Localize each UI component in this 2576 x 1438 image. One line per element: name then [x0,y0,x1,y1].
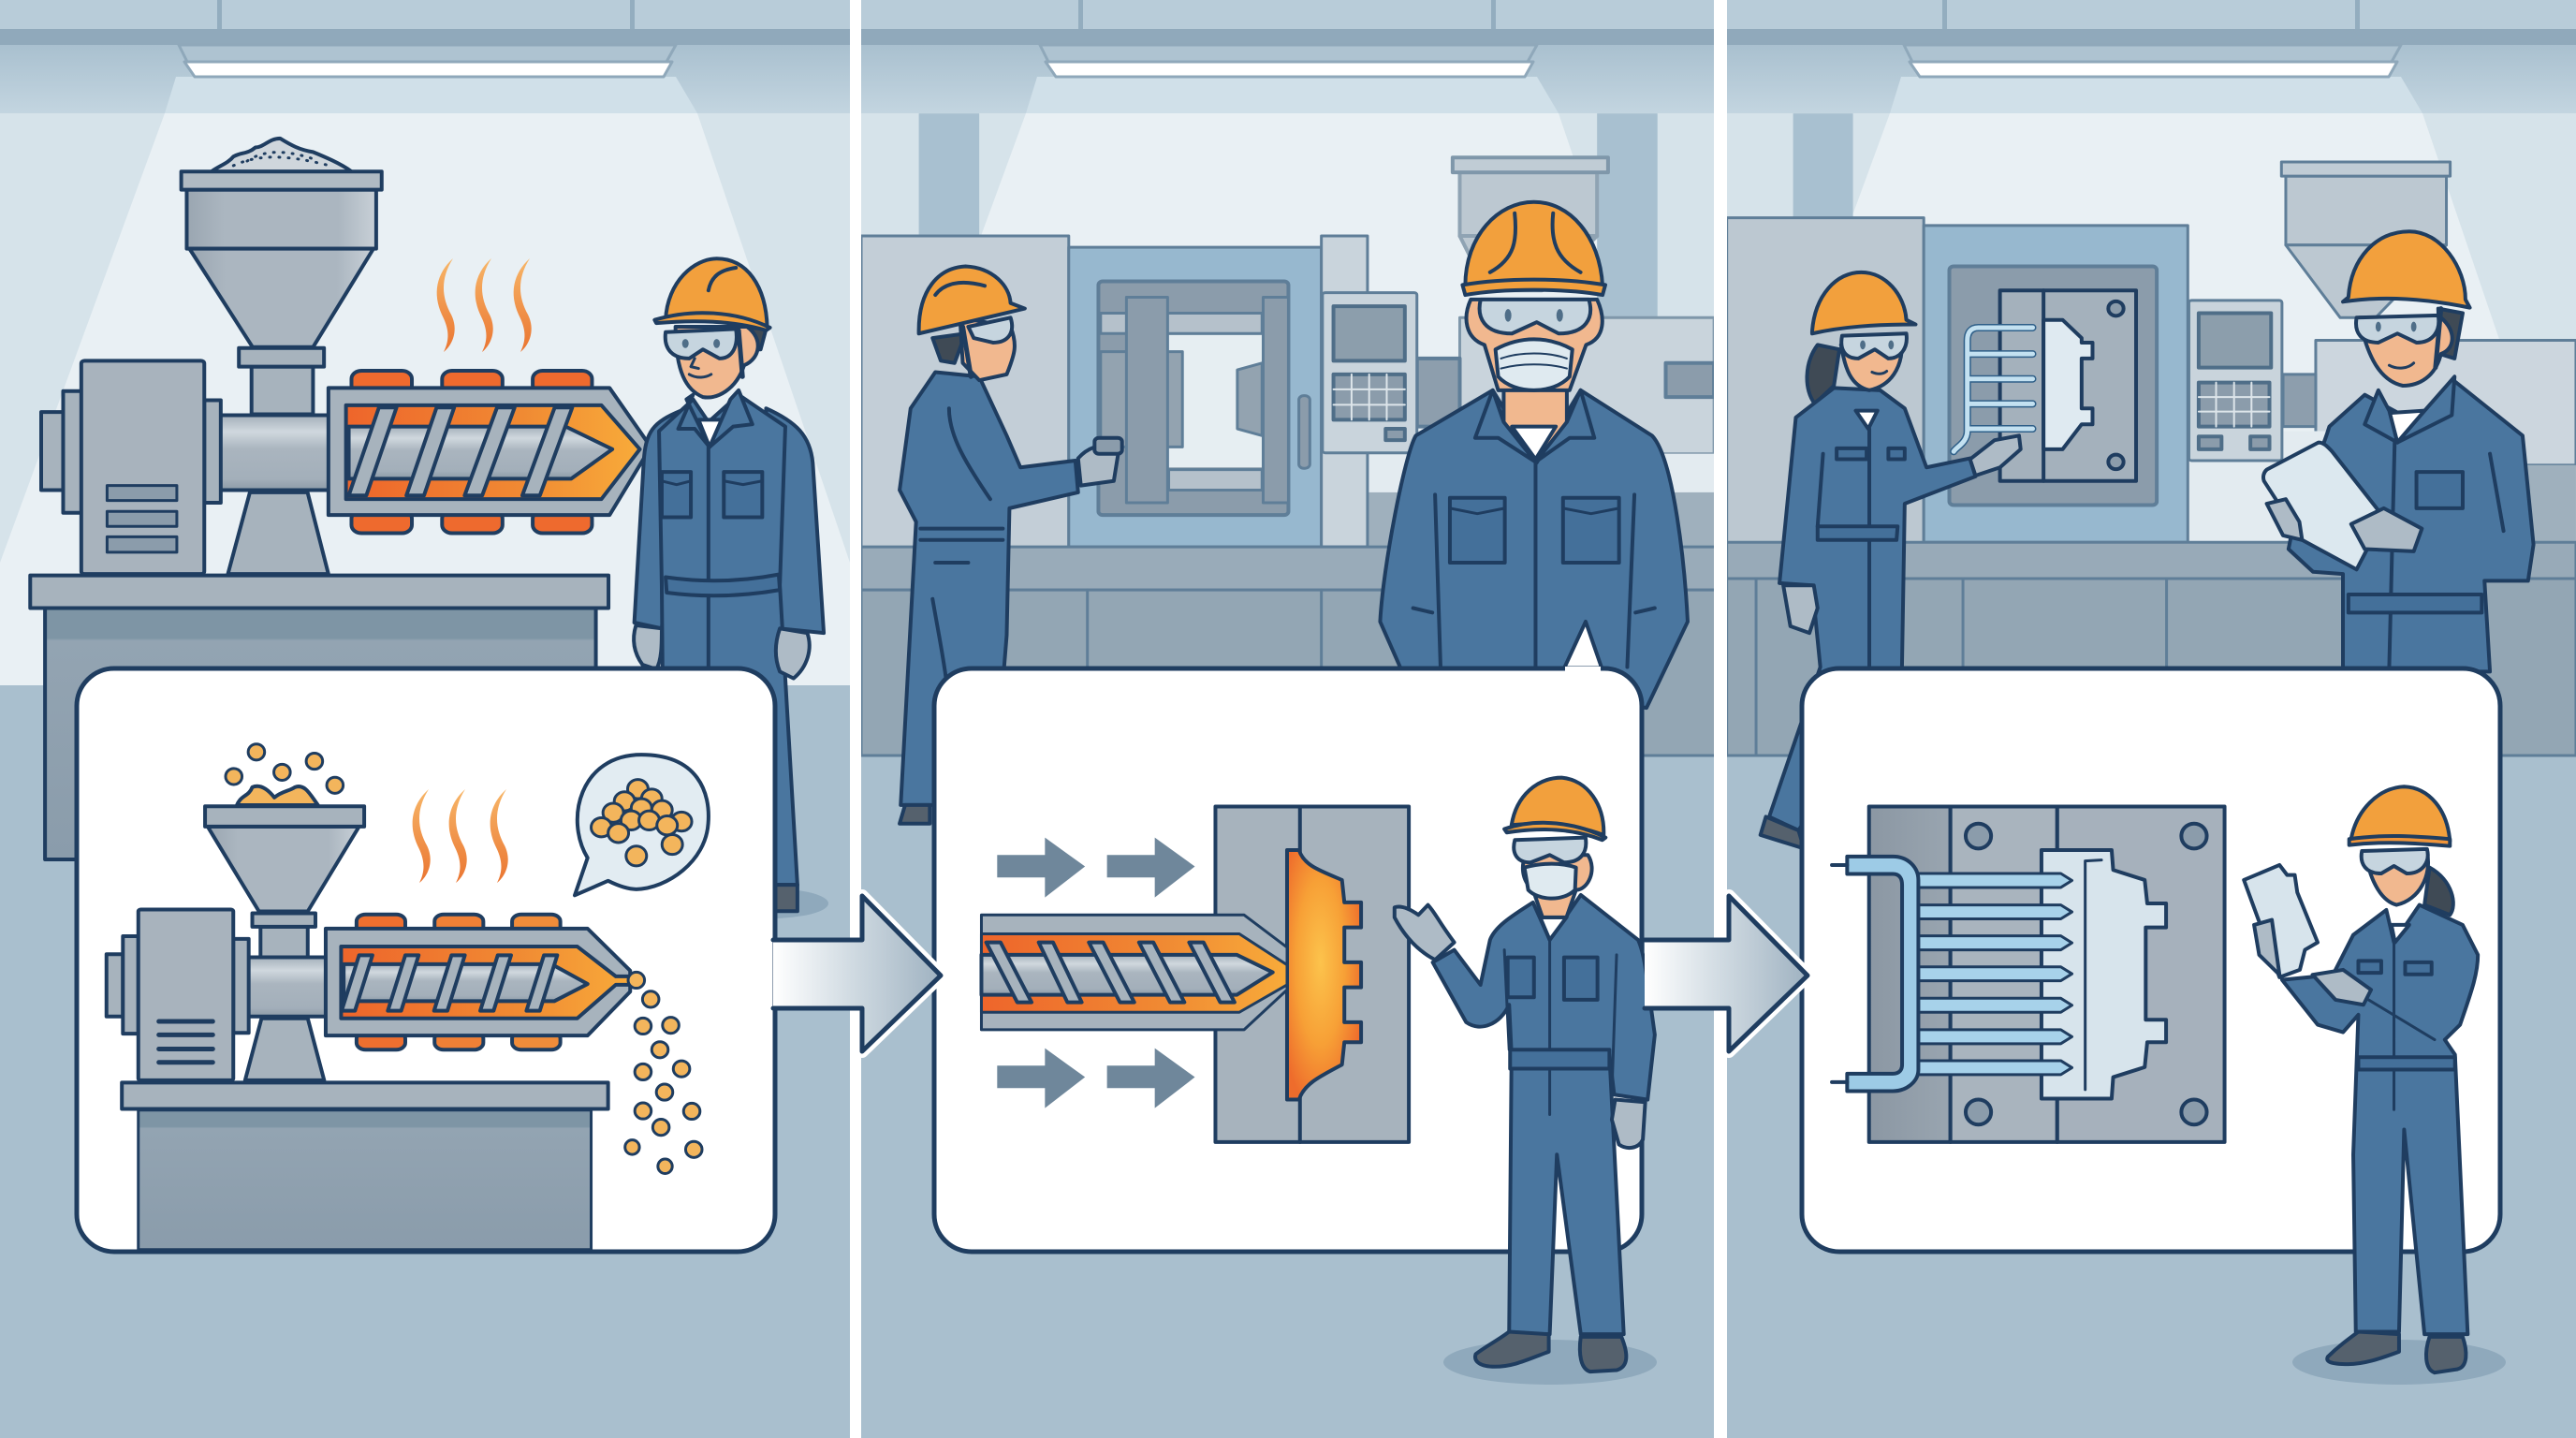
extruder machine [30,139,651,859]
panel gaps [850,0,1727,1438]
pressure arrows [997,838,1195,1108]
inset: mould filling schematic [981,807,1409,1142]
panel 2 scene: injection machine and operators [861,113,1718,824]
inset: cooling channels schematic [1832,807,2225,1142]
steam in inset [413,789,508,883]
steam above barrel [437,258,532,352]
panel 1 scene: extruder and operator [30,139,824,911]
floor shadow: panel 1 operator [710,888,828,918]
arrow: injection to cooling [1645,896,1808,1051]
callout inset 1: extruder detail [77,668,775,1252]
floor shadow: inset workers [1443,1340,2506,1385]
moulding machine with cooling channels [1727,162,2576,756]
speech bubble with pellets [575,755,709,895]
inset: extruder schematic [107,744,709,1250]
worker: with part in inset 3 [2244,786,2478,1372]
cooling tubes [1832,857,2072,1091]
callout inset 2: injection detail [934,622,1642,1252]
panel 3 scene: machine and operators [1727,113,2576,848]
worker: front-view operator with mask [1380,202,1688,708]
panel background: feed stage [0,0,854,1438]
worker: technician with tablet [2263,231,2534,671]
callout inset 3: cooling detail [1802,668,2500,1252]
background columns [919,113,1658,317]
plastic pellets [226,744,702,1174]
worker: side-view operator holding tool [900,267,1122,824]
arrow: feed to injection [773,896,941,1051]
panel background: cooling stage [1725,0,2576,1438]
background column [1793,113,1853,218]
worker: presenting in inset 2 [1395,778,1655,1372]
worker: woman pointing at mould [1761,272,2021,848]
injection moulding machine [861,157,1718,756]
worker: operator beside extruder [634,258,824,911]
panel background: injection stage [861,0,1715,1438]
